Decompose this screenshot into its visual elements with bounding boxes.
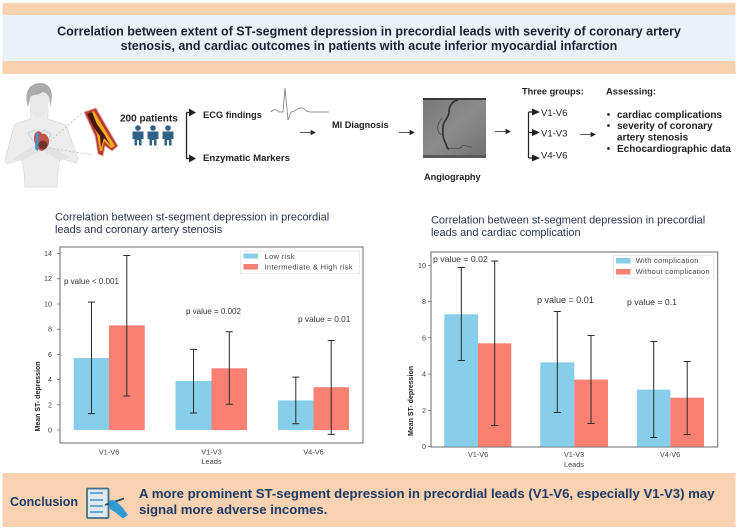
x axis labels: V1-V6 bbox=[99, 448, 119, 456]
x axis labels: V4-V6 bbox=[303, 448, 324, 456]
y axis labels: 0 bbox=[48, 426, 52, 434]
y axis labels bbox=[44, 249, 52, 434]
x axis labels: V1-V3 bbox=[201, 448, 222, 456]
y axis labels: 6 bbox=[422, 333, 426, 342]
heading: chart 1: leads and coronary artery stenosis bbox=[55, 224, 223, 236]
y axis labels: 4 bbox=[48, 375, 52, 384]
chart: stenosis bbox=[35, 247, 363, 466]
icon: artery with plaque bbox=[84, 108, 118, 156]
heading: chart 2: leads and cardiac complication bbox=[431, 227, 581, 239]
arrow: bracket to three groups bbox=[528, 108, 540, 162]
conclusion text: A more prominent ST-segment depression in precordial leads (V1-V6, especially V1-V3) may bbox=[139, 486, 715, 501]
arrow: bracket to ECG and enzymes bbox=[186, 108, 196, 162]
text: group labels: V1-V6 bbox=[541, 108, 567, 119]
conclusion text bbox=[139, 486, 715, 517]
title banner bbox=[2, 3, 736, 74]
p values: p value = 0.01 bbox=[537, 295, 594, 305]
error bars bbox=[458, 261, 691, 438]
text: three groups heading: Three groups: bbox=[522, 86, 584, 96]
x axis labels: Leads bbox=[564, 460, 584, 469]
heading: chart 1: Correlation between st-segment depression in precordial bbox=[55, 212, 329, 224]
text: group labels: V1-V3 bbox=[541, 128, 567, 140]
bars: without complication bbox=[478, 343, 704, 447]
y axis labels: 10 bbox=[44, 299, 52, 308]
y axis labels: 12 bbox=[44, 274, 52, 283]
y axis labels: 8 bbox=[48, 325, 52, 334]
error bars bbox=[88, 256, 335, 434]
image: angiography bbox=[423, 98, 486, 158]
text: assessing list: artery stenosis bbox=[617, 132, 689, 144]
x axis labels bbox=[99, 448, 324, 466]
y axis labels: 2 bbox=[422, 406, 426, 415]
panel: conclusion bbox=[2, 473, 736, 527]
legend bbox=[240, 251, 360, 274]
bars: low risk bbox=[74, 358, 314, 430]
y axis title: Mean ST- depression bbox=[35, 361, 42, 432]
text: assessing list bbox=[606, 86, 731, 155]
legend: With complication bbox=[636, 256, 699, 265]
x axis labels: V4-V6 bbox=[660, 450, 680, 459]
icon: three patients bbox=[132, 125, 174, 146]
icon: patient with heart bbox=[5, 83, 93, 187]
text: 200 patients: 200 patients bbox=[120, 114, 178, 124]
p values: p value < 0.001 bbox=[64, 277, 119, 286]
conclusion label: Conclusion bbox=[10, 495, 78, 509]
x axis labels bbox=[468, 450, 680, 469]
p values: p value = 0.1 bbox=[627, 297, 677, 307]
p values: p value = 0.002 bbox=[186, 307, 241, 316]
icon: ECG trace bbox=[271, 88, 329, 120]
text: enzymatic markers: Enzymatic Markers bbox=[203, 153, 290, 164]
arrow: to angiography bbox=[399, 130, 414, 134]
legend: Without complication bbox=[636, 267, 710, 276]
y axis labels: 8 bbox=[422, 297, 426, 306]
heading: chart 1 bbox=[55, 212, 329, 236]
x axis labels: Leads bbox=[201, 457, 222, 466]
text: ECG findings: ECG findings bbox=[203, 110, 262, 120]
y axis labels: 0 bbox=[422, 442, 426, 451]
p values bbox=[64, 277, 351, 324]
legend: Low risk bbox=[264, 252, 295, 261]
conclusion text: signal more adverse incomes. bbox=[139, 502, 327, 517]
arrow: to assessing bbox=[580, 132, 595, 136]
bars: with complication bbox=[444, 314, 670, 447]
title banner: stenosis, and cardiac outcomes in patients with acute inferior myocardial infarction bbox=[121, 39, 617, 53]
arrow: to MI diagnosis bbox=[300, 130, 315, 134]
icon: checklist with hand bbox=[87, 488, 128, 518]
bars: intermediate and high risk bbox=[109, 325, 349, 430]
y axis labels: 10 bbox=[418, 261, 426, 270]
text: assessing list: severity of coronary bbox=[617, 121, 713, 132]
p values: p value = 0.02 bbox=[433, 254, 488, 264]
text: assessing list: Echocardiographic data bbox=[617, 144, 731, 155]
y axis labels: 6 bbox=[48, 350, 52, 359]
heading: chart 2 bbox=[431, 214, 705, 239]
text: group labels bbox=[541, 108, 567, 162]
text: group labels: V4-V6 bbox=[541, 150, 567, 162]
x axis labels: V1-V3 bbox=[564, 450, 584, 459]
y axis labels: 2 bbox=[48, 400, 52, 409]
chart: complications bbox=[408, 252, 718, 469]
x axis labels: V1-V6 bbox=[468, 450, 488, 459]
y axis labels bbox=[418, 261, 426, 451]
y axis title: Mean ST- depression bbox=[408, 366, 415, 436]
title banner: Correlation between extent of ST-segment depression in precordial leads with severity of coronary artery bbox=[57, 24, 681, 38]
legend bbox=[614, 256, 714, 278]
p values: p value = 0.01 bbox=[298, 314, 351, 324]
text: MI diagnosis: MI Diagnosis bbox=[332, 120, 389, 130]
arrow: to groups bbox=[495, 130, 510, 134]
text: assessing list: Assessing: bbox=[606, 86, 656, 96]
y axis labels: 14 bbox=[44, 249, 52, 258]
y axis labels: 4 bbox=[422, 370, 426, 379]
p values bbox=[433, 254, 677, 307]
text: angiography: Angiography bbox=[424, 172, 482, 182]
legend: Intermediate & High risk bbox=[264, 262, 353, 271]
heading: chart 2: Correlation between st-segment depression in precordial bbox=[431, 214, 705, 226]
text: assessing list: cardiac complications bbox=[617, 110, 722, 121]
